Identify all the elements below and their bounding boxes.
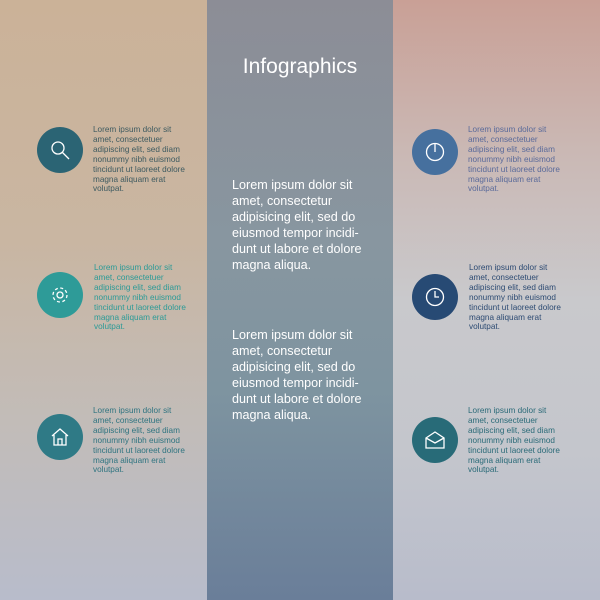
center text block 2: Lorem ipsum dolor sit amet, consectetur adipisicing elit, sed do eiusmod tempor incidi-dunt ut labore et dolore magna aliqua. [232, 328, 362, 422]
title: Infographics [243, 55, 357, 78]
icon: search [37, 127, 83, 173]
text: item 6: Lorem ipsum dolor sit amet, consectetuer adipiscing elit, sed diam nonummy nibh euismod tincidunt ut laoreet dolore magna aliquam erat volutpat. [468, 406, 560, 474]
icon: clock [412, 274, 458, 320]
center column background [207, 0, 393, 600]
text: item 3: Lorem ipsum dolor sit amet, consectetuer adipiscing elit, sed diam nonummy nibh euismod tincidunt ut laoreet dolore magna aliquam erat volutpat. [93, 406, 185, 474]
text: item 1: Lorem ipsum dolor sit amet, consectetuer adipiscing elit, sed diam nonummy nibh euismod tincidunt ut laoreet dolore magna aliquam erat volutpat. [93, 125, 185, 193]
right column background [393, 0, 600, 600]
icon: home [37, 414, 83, 460]
icon: envelope [412, 417, 458, 463]
left column background [0, 0, 207, 600]
icon: power [412, 129, 458, 175]
center text block 1: Lorem ipsum dolor sit amet, consectetur adipisicing elit, sed do eiusmod tempor incidi-dunt ut labore et dolore magna aliqua. [232, 178, 362, 272]
text: item 5: Lorem ipsum dolor sit amet, consectetuer adipiscing elit, sed diam nonummy nibh euismod tincidunt ut laoreet dolore magna aliquam erat volutpat. [469, 263, 561, 331]
text: item 4: Lorem ipsum dolor sit amet, consectetuer adipiscing elit, sed diam nonummy nibh euismod tincidunt ut laoreet dolore magna aliquam erat volutpat. [468, 125, 560, 193]
icon: gear [37, 272, 83, 318]
text: item 2: Lorem ipsum dolor sit amet, consectetuer adipiscing elit, sed diam nonummy nibh euismod tincidunt ut laoreet dolore magna aliquam erat volutpat. [94, 263, 186, 331]
